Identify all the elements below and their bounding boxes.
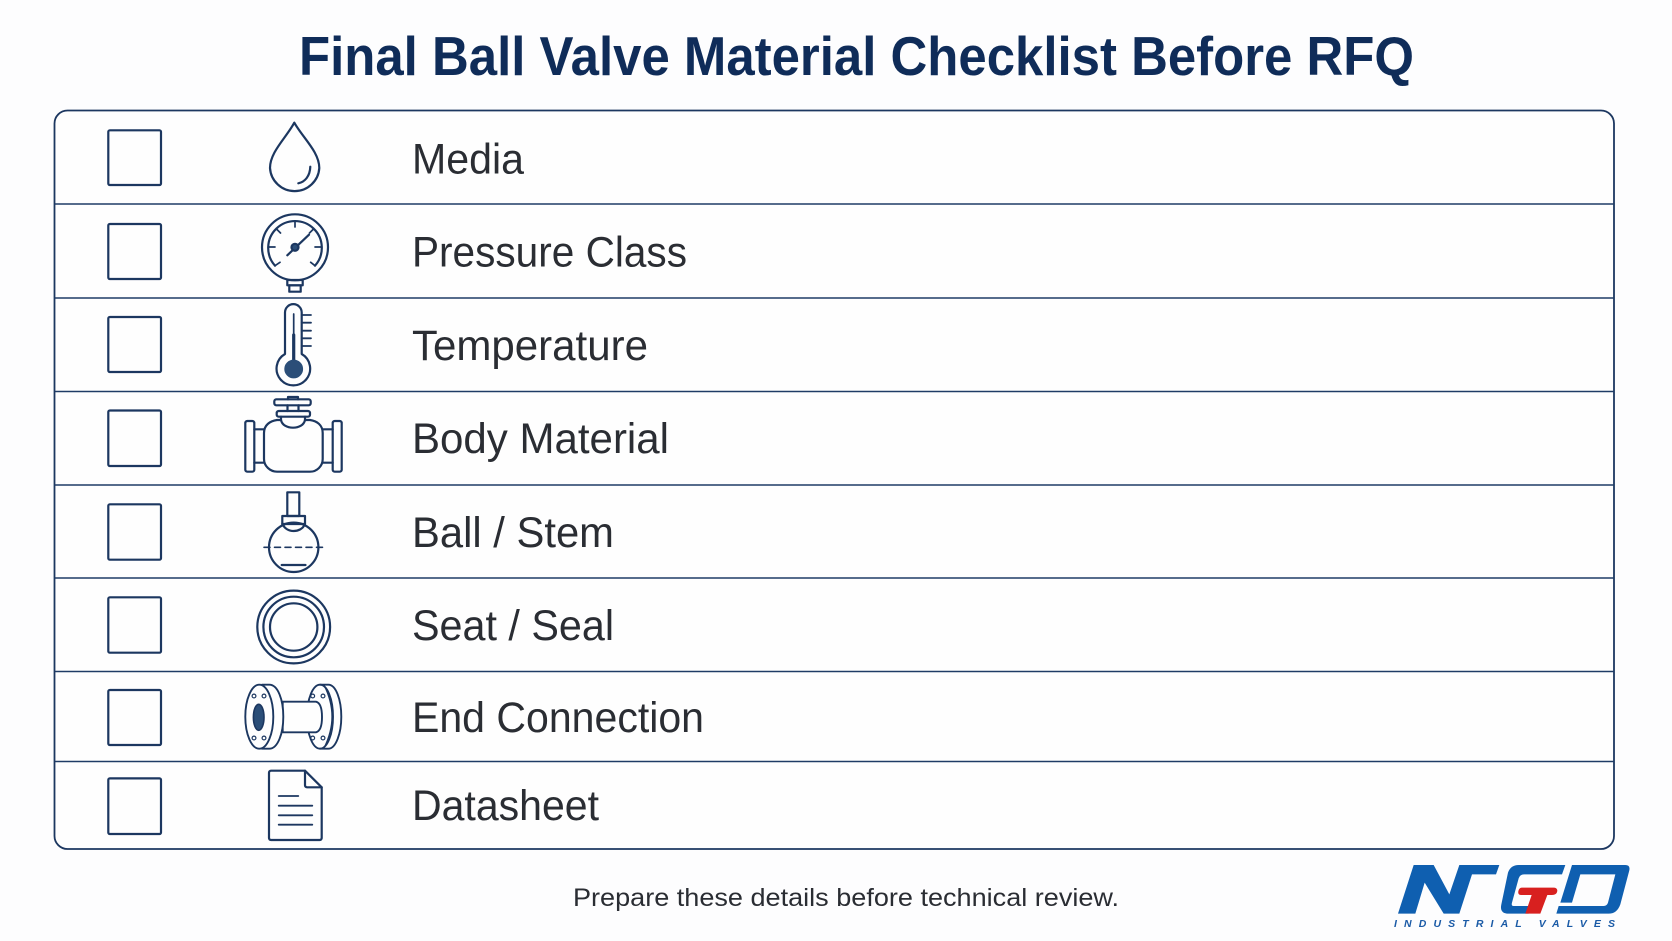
- label: datasheet: Datasheet: [412, 783, 599, 830]
- checkbox: pressure class: [108, 224, 161, 279]
- label: pressure class: Pressure Class: [412, 230, 687, 277]
- label: end connection: End Connection: [412, 695, 704, 742]
- checkbox: seat / seal: [108, 597, 161, 653]
- logo: NTGD Industrial Valves: INDUSTRIAL VALVES: [1394, 918, 1615, 930]
- checkbox: datasheet: [108, 778, 161, 834]
- icon: document: [269, 771, 322, 840]
- label: seat / seal: Seat / Seal: [412, 603, 614, 650]
- icon: valve body: [245, 397, 342, 472]
- checkbox: end connection: [108, 690, 161, 745]
- icon: thermometer: [277, 304, 311, 385]
- checkbox: body material: [108, 410, 161, 466]
- footer note: Prepare these details before technical review.: [573, 884, 1119, 912]
- icon: pressure gauge: [262, 214, 328, 292]
- checkbox: media: [108, 130, 161, 185]
- label: ball / stem: Ball / Stem: [412, 510, 614, 557]
- logo: NTGD Industrial Valves: [1394, 865, 1630, 930]
- label: media: Media: [412, 136, 524, 183]
- label: temperature: Temperature: [412, 323, 648, 370]
- checkbox: temperature: [108, 317, 161, 372]
- panel: checklist table: [54, 110, 1614, 849]
- checkbox: ball / stem: [108, 504, 161, 560]
- icon: water drop: [270, 123, 319, 191]
- icon: ball and stem: [264, 492, 323, 572]
- icon: flanged end connection: [245, 685, 341, 749]
- title: Final Ball Valve Material Checklist Before RFQ: [299, 25, 1414, 87]
- label: body material: Body Material: [412, 416, 669, 463]
- icon: seat ring: [257, 591, 330, 663]
